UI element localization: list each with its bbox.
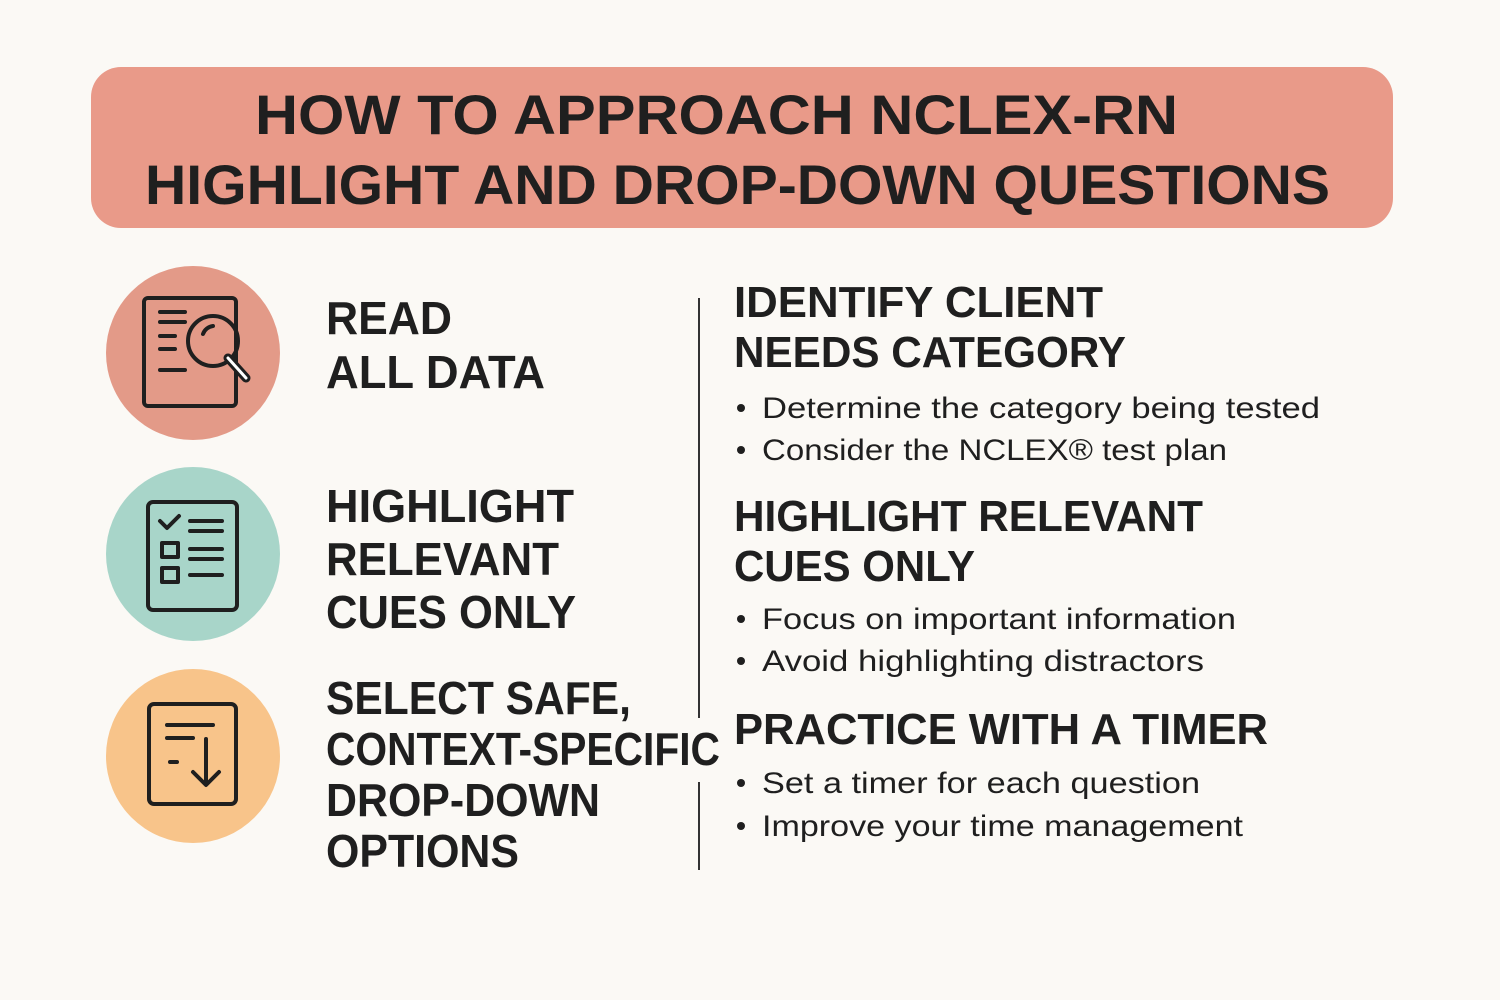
title banner: HIGHLIGHT AND DROP-DOWN QUESTIONS	[145, 153, 1330, 216]
icon: checklist	[106, 467, 280, 641]
section: practice with a timer: Set a timer for each question	[762, 767, 1200, 800]
icon: read data (document with magnifier)	[106, 266, 280, 440]
title banner	[91, 67, 1393, 228]
title banner: HOW TO APPROACH NCLEX-RN	[255, 83, 1178, 146]
left heading: select safe options: SELECT SAFE,	[326, 672, 631, 724]
section: identify client needs category	[734, 278, 1320, 467]
left heading: highlight relevant cues only: HIGHLIGHT	[326, 480, 574, 532]
section: practice with a timer	[734, 705, 1268, 843]
section: identify client needs category: IDENTIFY CLIENT	[734, 278, 1103, 327]
section: identify client needs category: NEEDS CATEGORY	[734, 328, 1126, 377]
left heading: read all data: READ	[326, 292, 452, 344]
section: highlight relevant cues only	[734, 492, 1236, 678]
section: highlight relevant cues only: HIGHLIGHT RELEVANT	[734, 492, 1203, 541]
section: highlight relevant cues only: Avoid highlighting distractors	[762, 645, 1204, 678]
left heading: highlight relevant cues only	[326, 480, 576, 638]
icon: drop-down	[106, 669, 280, 843]
left heading: read all data: ALL DATA	[326, 346, 545, 398]
left heading: highlight relevant cues only: CUES ONLY	[326, 586, 576, 638]
left heading: select safe options	[326, 672, 720, 877]
section: identify client needs category: Consider the NCLEX® test plan	[762, 434, 1227, 467]
section: highlight relevant cues only: Focus on important information	[762, 603, 1236, 636]
left heading: select safe options: OPTIONS	[326, 825, 519, 877]
section: identify client needs category: Determine the category being tested	[762, 392, 1320, 425]
left heading: highlight relevant cues only: RELEVANT	[326, 533, 559, 585]
section: highlight relevant cues only: CUES ONLY	[734, 542, 975, 591]
section: practice with a timer: PRACTICE WITH A TIMER	[734, 705, 1268, 754]
section: practice with a timer: Improve your time management	[762, 810, 1244, 843]
left heading: select safe options: DROP-DOWN	[326, 774, 600, 826]
left heading: select safe options: CONTEXT-SPECIFIC	[326, 723, 720, 775]
left heading: read all data	[326, 292, 545, 398]
